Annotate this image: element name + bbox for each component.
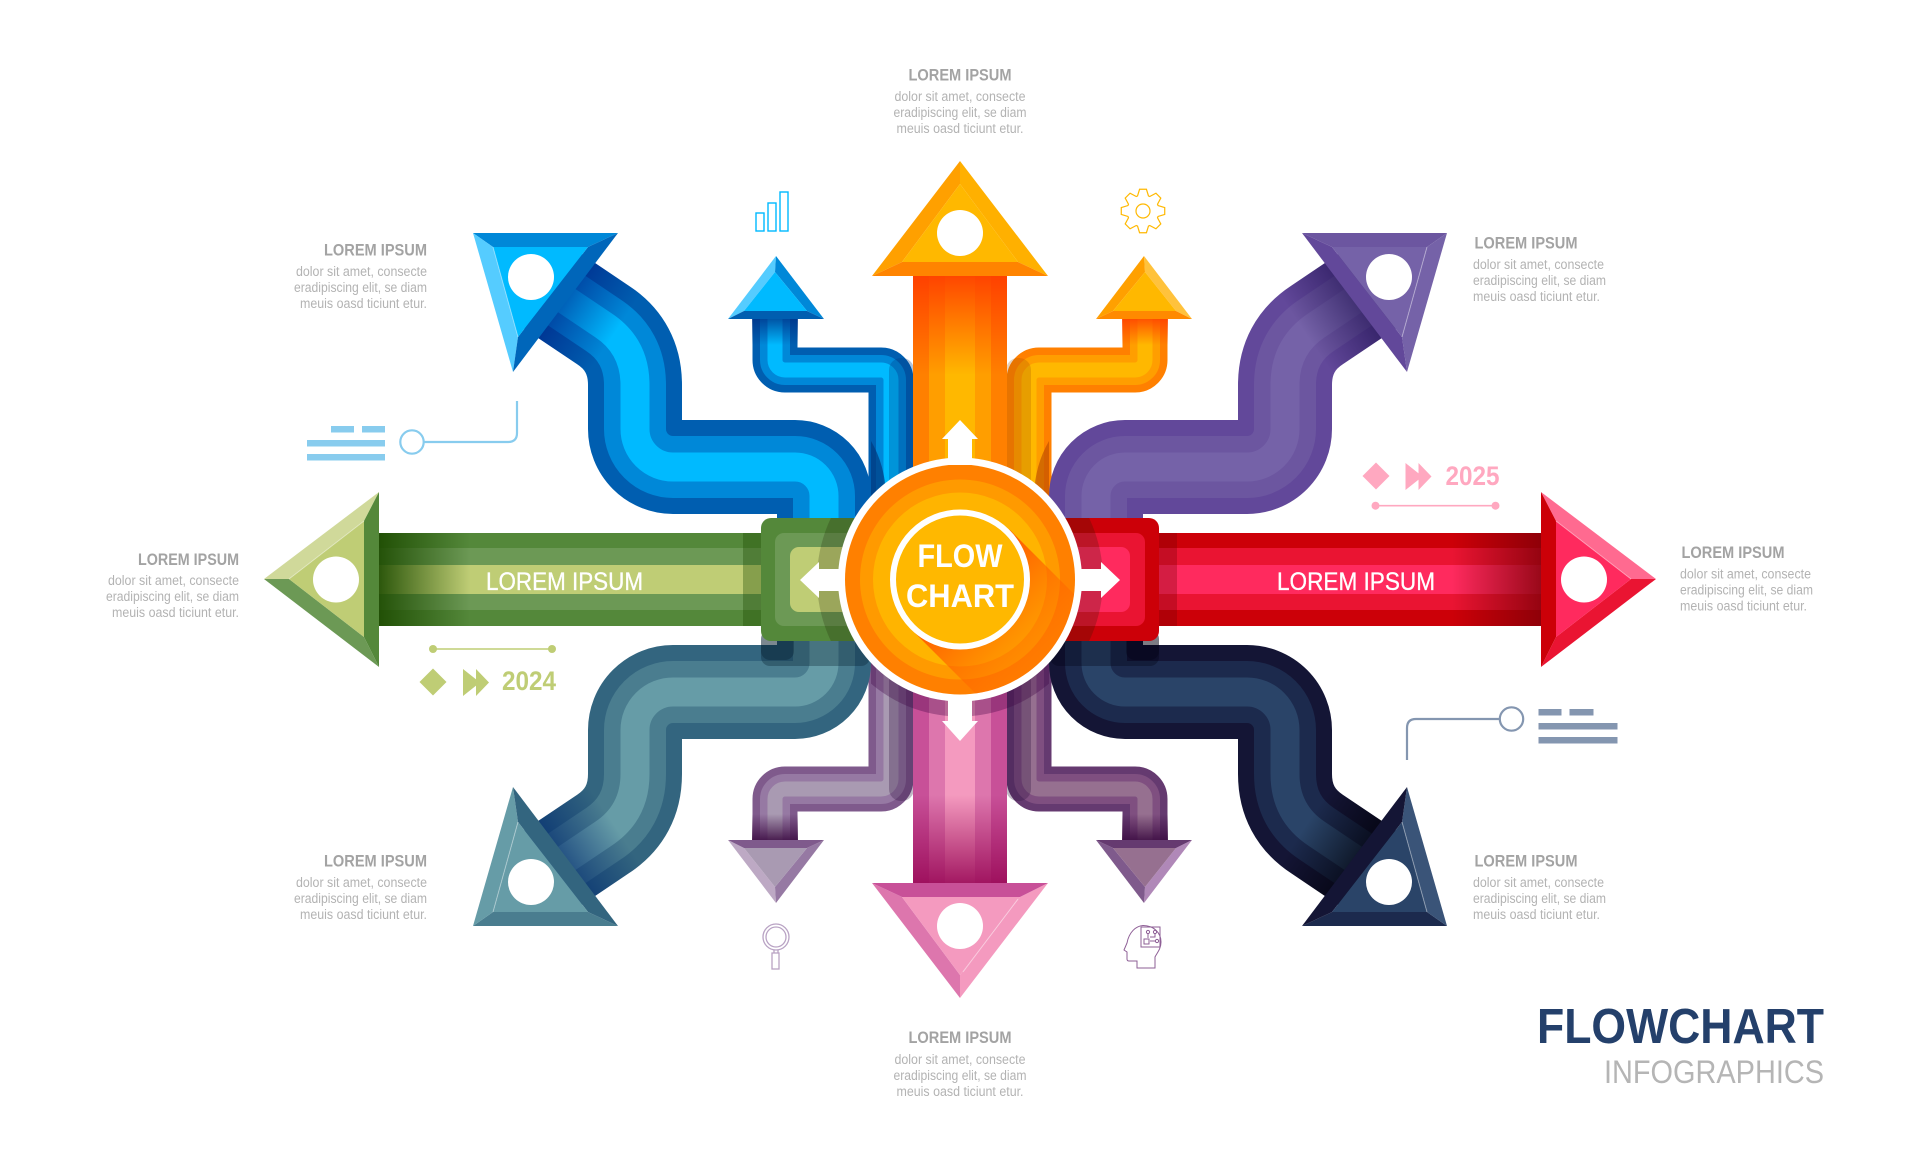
text block: upper right: LOREM IPSUM xyxy=(1474,234,1578,252)
text block: bottom: dolor sit amet, consecte xyxy=(894,1052,1026,1067)
text block: upper left: eradipiscing elit, se diam xyxy=(294,280,427,295)
text block: lower right xyxy=(1473,852,1606,922)
text block: lower left: LOREM IPSUM xyxy=(324,852,427,870)
text block: middle left xyxy=(106,551,239,620)
straight arrow: green, left xyxy=(264,492,770,667)
year marker: 2024: 2024 xyxy=(502,666,556,696)
text block: top: eradipiscing elit, se diam xyxy=(894,105,1026,120)
box shadows on lower pipes xyxy=(761,630,1159,666)
text block: top xyxy=(894,66,1026,136)
text block: upper left: LOREM IPSUM xyxy=(324,242,427,260)
small pipe arrow: blue, top left xyxy=(728,256,914,530)
text block: lower right: LOREM IPSUM xyxy=(1474,852,1578,870)
text block: upper right xyxy=(1473,234,1606,304)
text block: middle right xyxy=(1680,544,1813,614)
text block: top: dolor sit amet, consecte xyxy=(894,89,1026,104)
icon: bar chart xyxy=(756,192,788,231)
connector box: red xyxy=(1010,518,1159,641)
small pipe arrow: lilac, bottom left xyxy=(728,629,914,903)
text block: bottom: meuis oasd ticiunt etur. xyxy=(896,1084,1024,1099)
text block: lower right: meuis oasd ticiunt etur. xyxy=(1473,907,1600,922)
title: flowchart infographics xyxy=(1537,1000,1824,1090)
small pipe arrow: plum, bottom right xyxy=(1006,629,1192,903)
white direction arrows xyxy=(800,420,1120,741)
year marker: 2024 xyxy=(420,645,556,696)
icon: gear xyxy=(1121,189,1165,233)
center hub xyxy=(838,458,1082,701)
straight arrow: orange, up xyxy=(872,161,1048,510)
icon: magnifier xyxy=(763,924,789,969)
year marker: 2025 xyxy=(1362,461,1500,510)
text block: bottom: eradipiscing elit, se diam xyxy=(894,1068,1026,1083)
text block: upper left: meuis oasd ticiunt etur. xyxy=(300,296,427,311)
text block: lower left: dolor sit amet, consecte xyxy=(296,875,427,890)
shaft label: green: LOREM IPSUM xyxy=(486,568,643,596)
shaft label: red: LOREM IPSUM xyxy=(1277,568,1435,596)
text block: top: meuis oasd ticiunt etur. xyxy=(896,121,1024,136)
center hub: FLOW xyxy=(918,538,1003,574)
straight arrow: pink, down xyxy=(872,650,1048,998)
big pipe arrow: blue, top left xyxy=(473,233,824,545)
callout: navy note with connector xyxy=(1407,707,1618,760)
title: flowchart infographics: FLOWCHART xyxy=(1537,1000,1824,1054)
text block: lower left xyxy=(294,852,427,922)
center hub: CHART xyxy=(906,578,1014,614)
text block: middle right: eradipiscing elit, se diam xyxy=(1680,582,1813,598)
text block: upper right: dolor sit amet, consecte xyxy=(1473,257,1604,272)
text block: upper right: eradipiscing elit, se diam xyxy=(1473,273,1606,288)
text block: middle right: dolor sit amet, consecte xyxy=(1680,566,1811,582)
text block: lower left: meuis oasd ticiunt etur. xyxy=(300,907,427,922)
text block: bottom xyxy=(894,1029,1026,1099)
text block: top: LOREM IPSUM xyxy=(908,66,1012,84)
big pipe arrow: navy, bottom right xyxy=(1096,614,1447,926)
callout: blue note with connector xyxy=(307,401,517,460)
text block: upper left xyxy=(294,242,427,311)
text block: middle right: meuis oasd ticiunt etur. xyxy=(1680,598,1807,614)
text block: upper right: meuis oasd ticiunt etur. xyxy=(1473,289,1600,304)
text block: lower right: eradipiscing elit, se diam xyxy=(1473,891,1606,906)
small pipe arrow: orange, top right xyxy=(1006,256,1192,530)
text block: middle left: meuis oasd ticiunt etur. xyxy=(112,605,239,620)
text block: middle left: dolor sit amet, consecte xyxy=(108,573,239,588)
straight arrow: red, right xyxy=(1150,492,1656,667)
hub cast shadows xyxy=(818,518,1102,716)
big pipe arrow: purple, top right xyxy=(1096,233,1447,545)
connector box: green xyxy=(761,518,910,641)
title: flowchart infographics: INFOGRAPHICS xyxy=(1604,1054,1824,1090)
year marker: 2025: 2025 xyxy=(1446,461,1500,491)
big pipe arrow: teal, bottom left xyxy=(473,614,824,926)
text block: middle left: eradipiscing elit, se diam xyxy=(106,589,239,604)
text block: lower left: eradipiscing elit, se diam xyxy=(294,891,427,906)
text block: upper left: dolor sit amet, consecte xyxy=(296,264,427,279)
icon: head with circuit xyxy=(1124,926,1161,968)
text block: bottom: LOREM IPSUM xyxy=(908,1029,1012,1047)
text block: middle right: LOREM IPSUM xyxy=(1682,544,1784,562)
text block: lower right: dolor sit amet, consecte xyxy=(1473,875,1604,890)
text block: middle left: LOREM IPSUM xyxy=(138,551,239,569)
